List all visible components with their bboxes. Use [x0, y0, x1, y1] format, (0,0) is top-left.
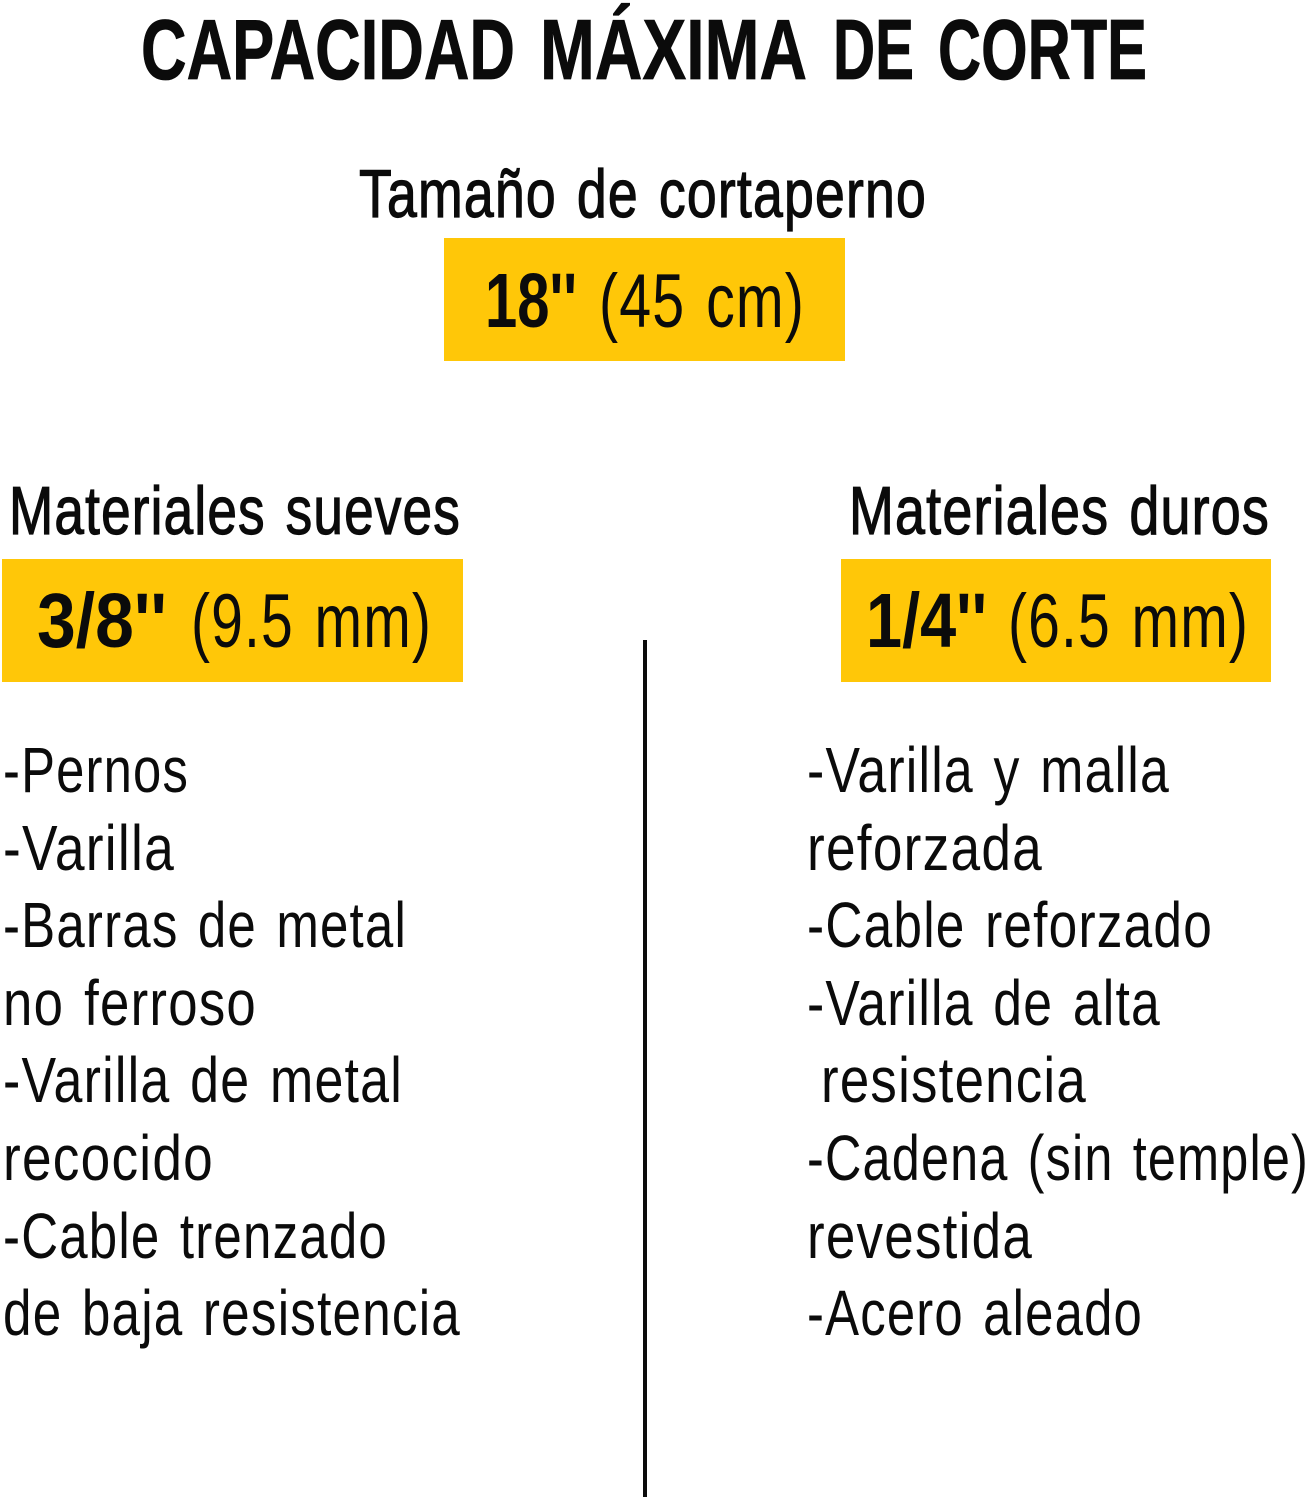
soft materials list: -Pernos [3, 734, 189, 806]
soft materials list: recocido [3, 1122, 214, 1194]
size badge [444, 238, 845, 361]
hard materials list: -Varilla de alta [807, 967, 1161, 1039]
soft materials badge [2, 559, 463, 682]
soft materials list [3, 734, 461, 1349]
soft materials badge: (9.5 mm) [191, 579, 432, 664]
soft materials list: -Varilla [3, 812, 175, 884]
size badge: 18'' [485, 258, 577, 344]
hard materials list: -Acero aleado [807, 1277, 1143, 1349]
soft materials badge: 3/8'' [37, 578, 167, 664]
heading: soft materials: Materiales sueves [9, 473, 461, 549]
hard materials badge [841, 559, 1271, 682]
panel: hard materials [807, 473, 1309, 1349]
title: CAPACIDAD [141, 3, 515, 98]
title: CORTE [938, 3, 1147, 98]
size badge: (45 cm) [599, 259, 805, 344]
hard materials list: -Varilla y malla [807, 734, 1170, 806]
soft materials list: -Varilla de metal [3, 1044, 403, 1116]
soft materials list: de baja resistencia [3, 1277, 461, 1349]
soft materials list: -Barras de metal [3, 889, 407, 961]
hard materials list: -Cable reforzado [807, 889, 1213, 961]
hard materials list [807, 734, 1309, 1349]
hard materials list: resistencia [821, 1044, 1087, 1116]
title: DE [833, 3, 914, 98]
panel: soft materials [2, 473, 463, 1349]
soft materials list: -Cable trenzado [3, 1200, 388, 1272]
title: MÁXIMA [540, 3, 807, 98]
hard materials list: revestida [807, 1200, 1033, 1272]
center divider [643, 640, 647, 1497]
hard materials badge: 1/4'' [866, 578, 987, 664]
heading: cutter size: Tamaño de cortaperno [359, 156, 927, 232]
soft materials list: no ferroso [3, 967, 257, 1039]
title [141, 3, 1147, 98]
hard materials list: reforzada [807, 812, 1043, 884]
